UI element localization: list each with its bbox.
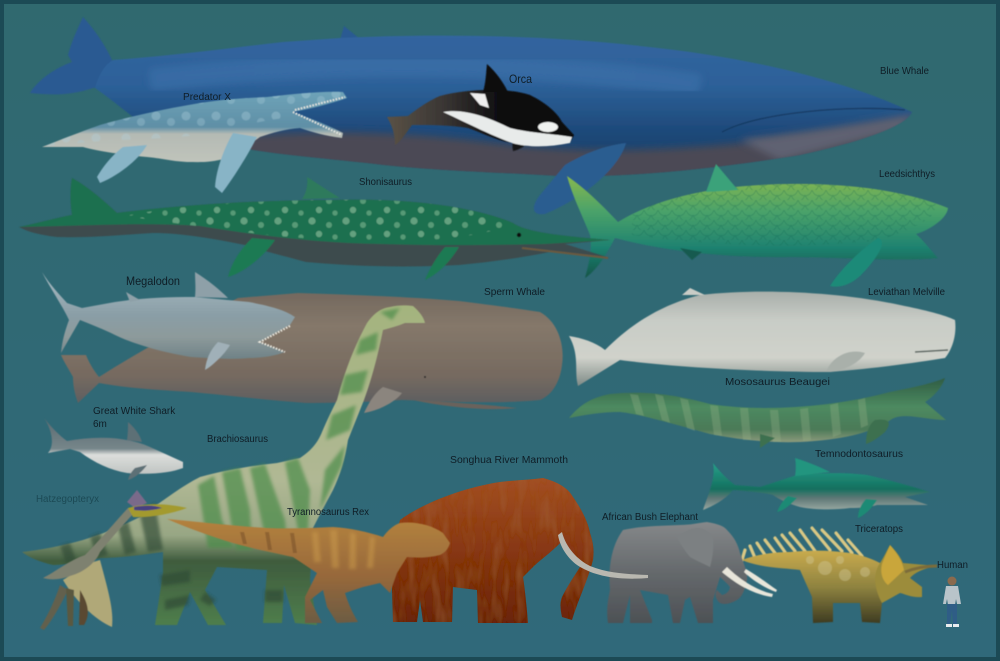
animal: human bbox=[943, 576, 961, 627]
animal: songhua river mammoth bbox=[392, 478, 648, 623]
animal: orca bbox=[387, 64, 574, 151]
label: predator X: Predator X bbox=[183, 92, 231, 103]
animal: brachiosaurus bbox=[22, 305, 425, 625]
label: leviathan melville: Leviathan Melville bbox=[868, 287, 945, 298]
label: temnodontosaurus: Temnodontosaurus bbox=[815, 449, 903, 460]
animal: african bush elephant bbox=[607, 522, 777, 623]
animal: great white shark bbox=[44, 418, 183, 480]
animal: megalodon bbox=[42, 272, 295, 370]
animal: shonisaurus bbox=[19, 177, 610, 280]
animal: leviathan melville bbox=[569, 288, 955, 386]
label: african bush elephant: African Bush Elephant bbox=[602, 512, 698, 523]
label: leedsichthys: Leedsichthys bbox=[879, 169, 935, 180]
label: blue whale: Blue Whale bbox=[880, 66, 929, 77]
animal: mososaurus beaugei bbox=[569, 378, 946, 448]
label: mososaurus beaugei: Mososaurus Beaugei bbox=[725, 376, 830, 388]
label: great white shark: 6m bbox=[93, 419, 107, 430]
animal: blue whale bbox=[30, 17, 920, 214]
animal: predator X bbox=[42, 92, 347, 193]
label: triceratops: Triceratops bbox=[855, 524, 903, 535]
animal: temnodontosaurus bbox=[703, 458, 930, 518]
label: songhua river mammoth: Songhua River Mammoth bbox=[450, 455, 568, 466]
animal: triceratops bbox=[742, 528, 937, 623]
animal: tyrannosaurus rex bbox=[167, 519, 450, 623]
animal: sperm whale bbox=[61, 293, 563, 413]
label: shonisaurus: Shonisaurus bbox=[359, 177, 412, 188]
label: brachiosaurus: Brachiosaurus bbox=[207, 434, 268, 445]
label: megalodon: Megalodon bbox=[126, 274, 180, 288]
label: great white shark: Great White Shark bbox=[93, 406, 175, 417]
label: orca: Orca bbox=[509, 72, 532, 86]
label: human: Human bbox=[937, 560, 968, 571]
label: tyrannosaurus rex: Tyrannosaurus Rex bbox=[287, 507, 369, 518]
label: hatzegopteryx: Hatzegopteryx bbox=[36, 494, 99, 505]
animal: leedsichthys bbox=[567, 164, 948, 287]
label: sperm whale: Sperm Whale bbox=[484, 287, 545, 298]
animal: hatzegopteryx bbox=[40, 490, 187, 630]
